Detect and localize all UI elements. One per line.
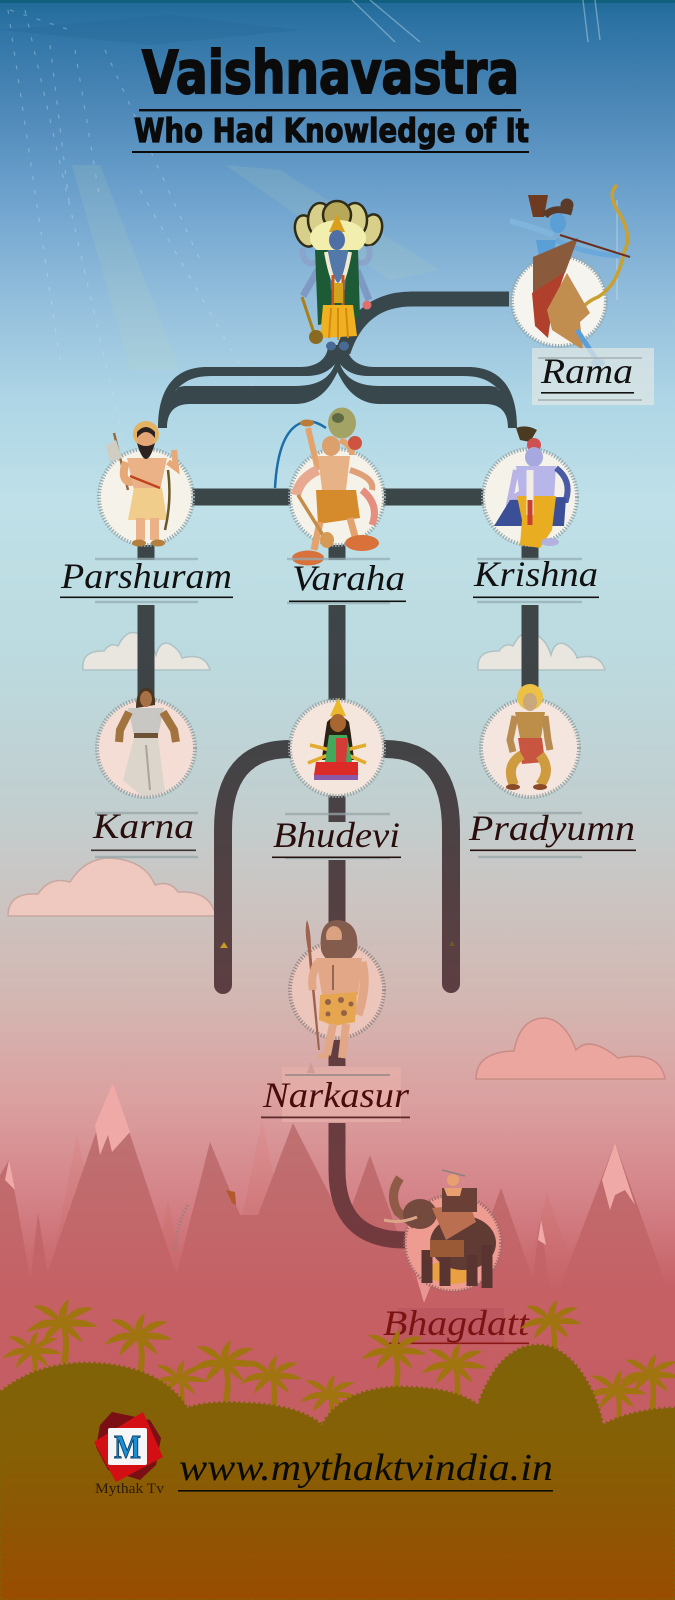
node: Bhudevi [290, 698, 384, 796]
figure: Parshuram [106, 421, 176, 546]
figure: Bhudevi [308, 698, 366, 780]
node: Krishna [483, 426, 577, 548]
figure: Narkasur with spear [306, 920, 364, 1059]
figure: Bhagdatt on war elephant [384, 1170, 496, 1288]
portrait ring [99, 449, 193, 545]
subtitle: Who Had Knowledge of It [134, 111, 529, 150]
label: Krishna: Krishna [473, 554, 598, 594]
connector lines tree [146, 299, 530, 1240]
node: Narkasur [290, 920, 384, 1059]
portrait ring [483, 449, 577, 545]
node: Pradyumn [481, 684, 579, 797]
cloud: below Parshuram [83, 633, 210, 670]
node: Parshuram [99, 421, 193, 546]
icon: red star badge: M [114, 1429, 141, 1466]
label: Rama [532, 348, 654, 405]
palm trees [3, 1299, 675, 1428]
portrait ring [512, 256, 606, 346]
logo: Mythak Tv [94, 1412, 165, 1497]
title: Vaishnavastra [142, 38, 519, 107]
figure: Rama with bow [510, 185, 630, 367]
portrait ring [290, 942, 384, 1038]
logo caption: Mythak Tv [95, 1481, 165, 1497]
label: Karna: Karna [92, 806, 194, 846]
portrait ring [481, 699, 579, 797]
figure: Vishnu [291, 201, 386, 350]
label: Bhagdatt: Bhagdatt [383, 1303, 530, 1343]
portrait ring [97, 699, 195, 797]
cloud: beside Bhudevi [8, 858, 216, 916]
label: Parshuram: Parshuram [60, 556, 232, 596]
portrait ring [290, 449, 384, 545]
mountain range [0, 1083, 675, 1310]
label: Narkasur [261, 1062, 410, 1122]
label: Karna [91, 806, 198, 857]
small markers on the side connectors [220, 941, 455, 948]
background light rays [0, 0, 675, 470]
label: Rama: Rama [540, 351, 633, 391]
figure: Pradyumn [506, 684, 550, 790]
label: Narkasur: Narkasur [262, 1075, 410, 1115]
node: Rama [510, 185, 630, 367]
portrait ring [290, 700, 384, 796]
node: Bhagdatt [384, 1170, 501, 1291]
node: Karna [97, 688, 195, 797]
figure: Krishna [494, 426, 568, 548]
label: Pradyumn: Pradyumn [468, 808, 635, 848]
node: Varaha [275, 408, 384, 566]
cloud: below Krishna [478, 633, 605, 670]
label: Bhudevi: Bhudevi [273, 815, 400, 855]
connector fork to Parshuram and Krishna [158, 345, 517, 428]
figure: Varaha holding the earth [275, 408, 379, 566]
label: Varaha: Varaha [292, 558, 405, 598]
ground with hills [0, 1345, 675, 1600]
website address: www.mythaktvindia.in [179, 1447, 553, 1489]
portrait ring [405, 1195, 501, 1291]
figure: Karna [119, 688, 176, 796]
cloud: right of Narkasur [476, 1018, 665, 1079]
